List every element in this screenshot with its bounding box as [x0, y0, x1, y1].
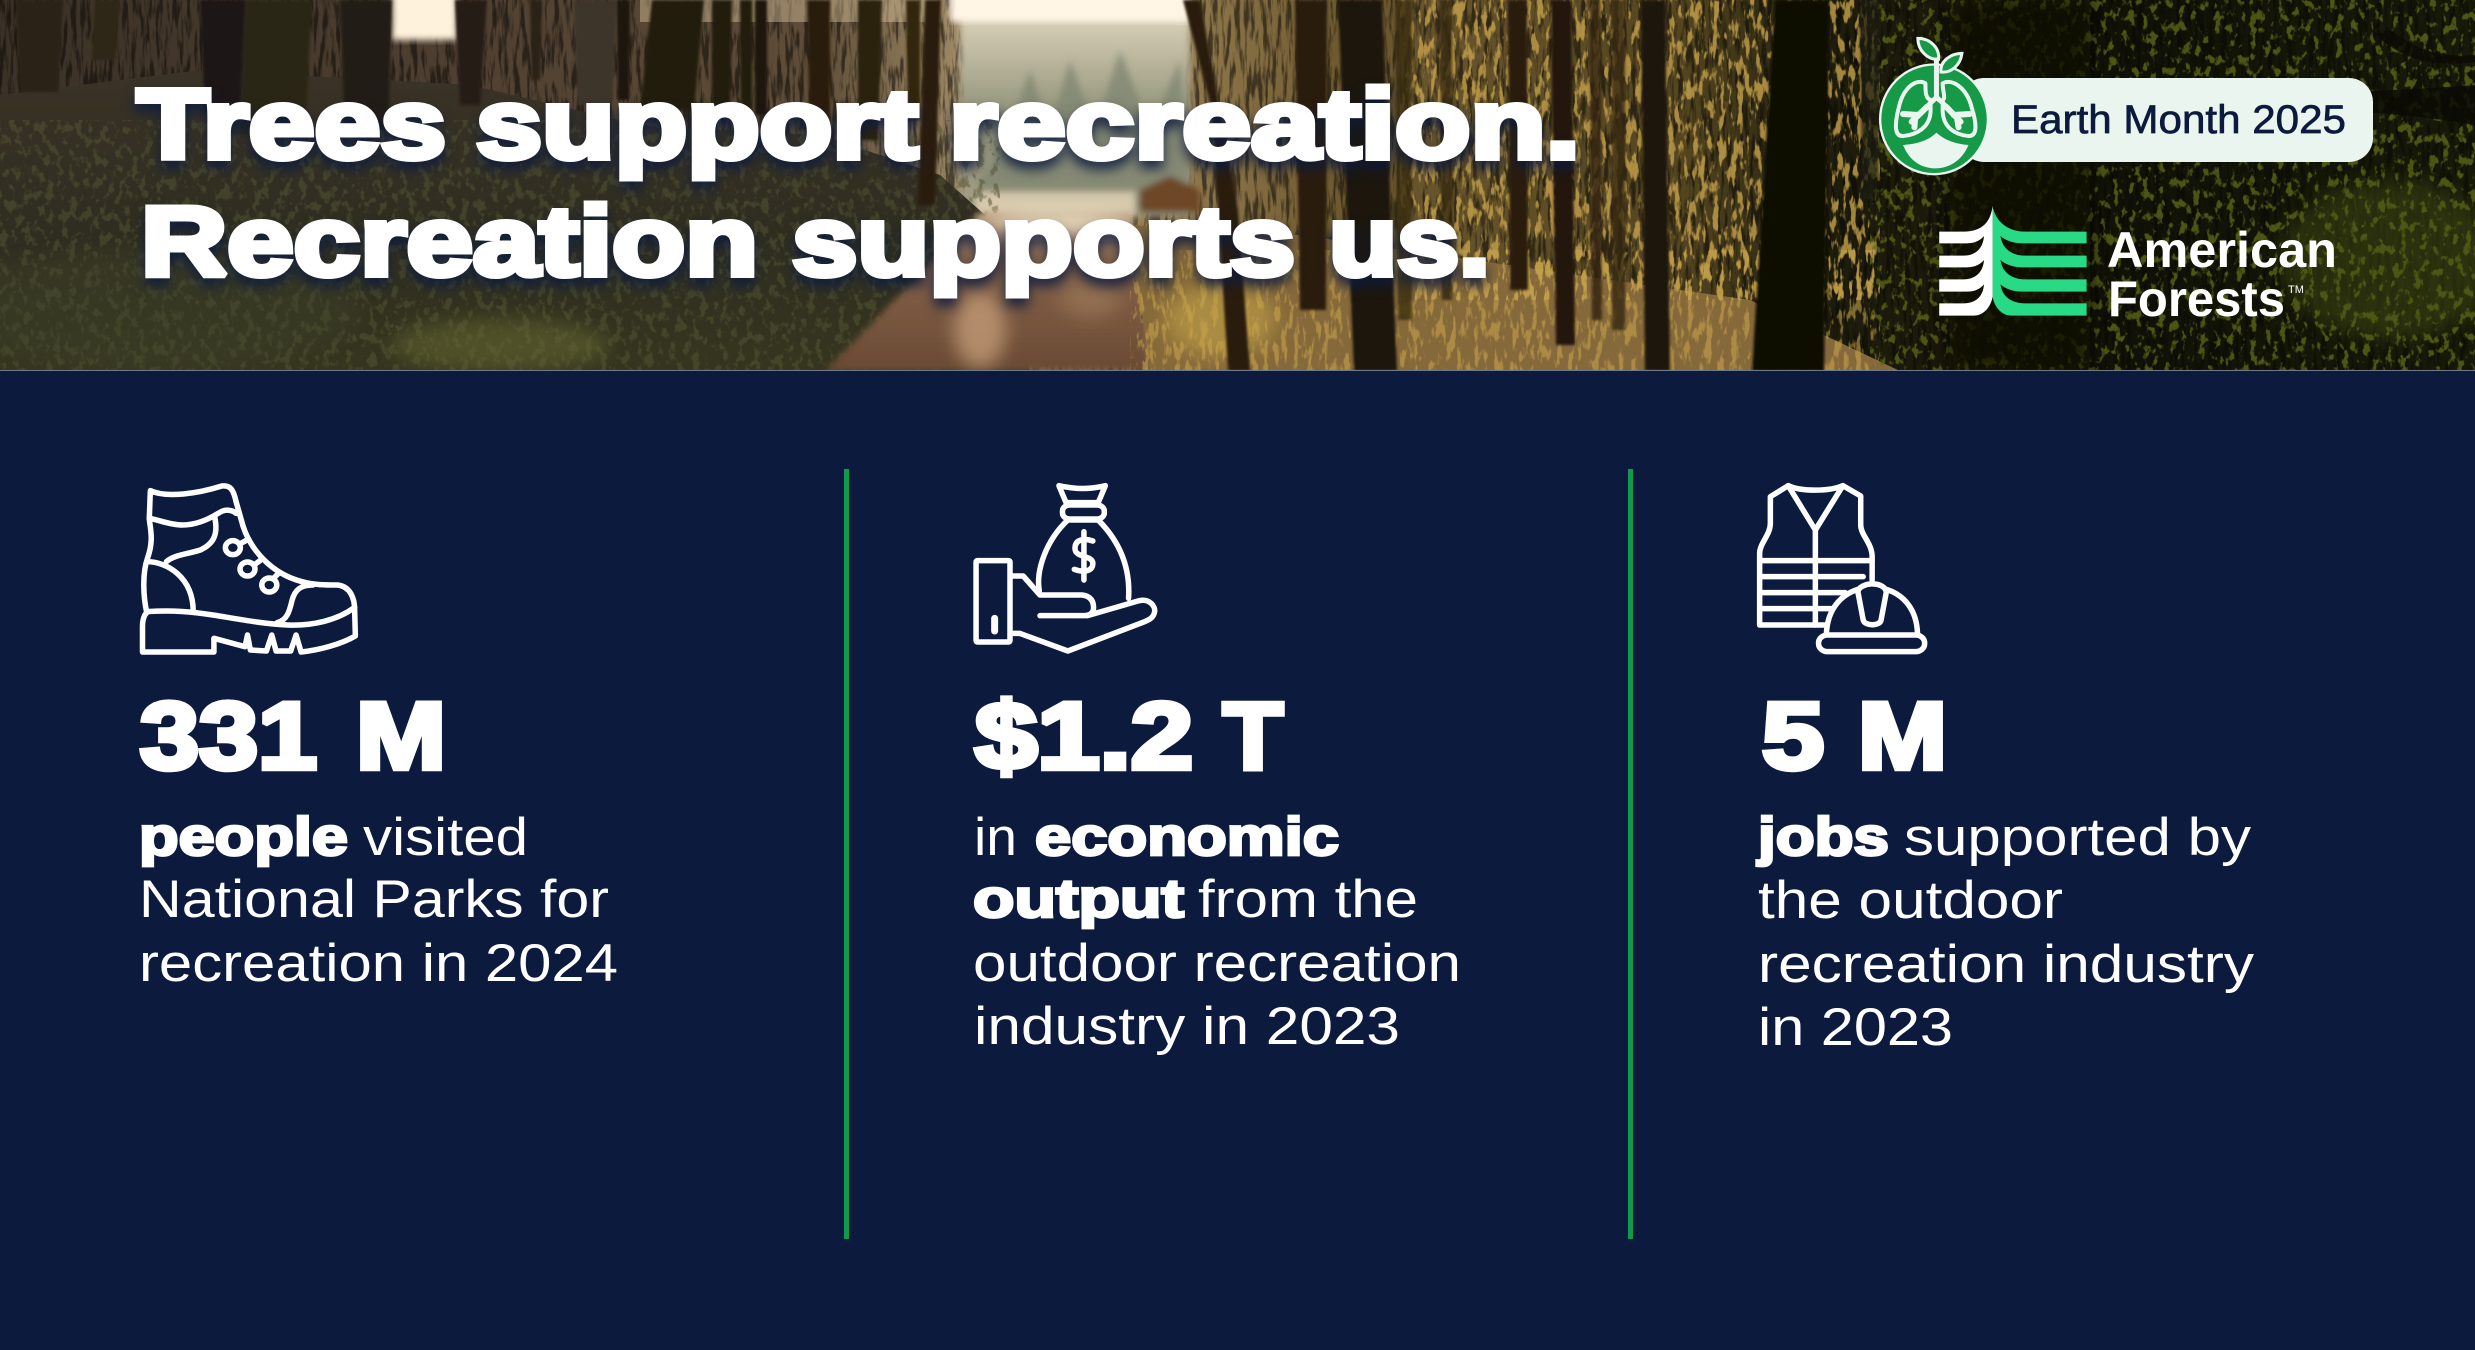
- description: people visited National Parks: people: [139, 807, 348, 867]
- right canopy: [1870, 0, 2475, 371]
- left hillside: [0, 70, 1030, 371]
- dirt path: [825, 210, 1150, 371]
- description: people visited National Parks: visited: [363, 808, 528, 867]
- description: economic output: outdoor recreation: [973, 934, 1461, 993]
- title: two-line heading: support: [476, 69, 918, 179]
- stat: 5 M: M: [1858, 684, 1947, 790]
- description: people visited National Parks: National Parks for: [139, 870, 609, 929]
- stat: 331 M: [140, 684, 446, 790]
- logo: American Forests: TM: [2288, 284, 2304, 296]
- description: jobs supported: in 2023: [1758, 998, 1953, 1057]
- description: jobs supported: supported by: [1904, 808, 2252, 867]
- description: people visited National Parks: recreation in 2024: [139, 934, 618, 993]
- logo: American Forests: [1939, 206, 2337, 327]
- description: economic output: [973, 807, 1461, 1056]
- golden undergrowth: [1130, 225, 1900, 371]
- title: two-line heading: recreation.: [949, 69, 1580, 179]
- stat: 5 M: [1762, 684, 1947, 790]
- description: economic output: output: [973, 869, 1184, 929]
- divider: [844, 469, 849, 1239]
- panel: national park visitors: [139, 486, 618, 993]
- header forest photo: [0, 0, 2475, 371]
- stat: 5 M: 5: [1762, 684, 1824, 790]
- title: two-line heading: us.: [1329, 186, 1490, 296]
- description: jobs supported: the outdoor: [1758, 871, 2063, 930]
- description: jobs supported: jobs: [1757, 807, 1889, 867]
- stat: $1.2 T: T: [1223, 684, 1283, 790]
- panel: jobs supported: [1757, 486, 2255, 1057]
- moss on trunks: [1400, 0, 1880, 300]
- badge: Earth Month 2025: Earth Month 2025: [2011, 98, 2346, 142]
- logo: American Forests: Forests: [2108, 271, 2285, 327]
- title: two-line heading: [137, 69, 1580, 296]
- tree trunks: [16, 0, 1880, 371]
- description: economic output: from the: [1198, 870, 1418, 929]
- icon: hiking boot: [142, 486, 355, 652]
- description: jobs supported: recreation industry: [1758, 935, 2255, 994]
- badge: Earth Month 2025: [1879, 38, 2373, 175]
- panel: economic output: [973, 486, 1461, 1056]
- stat: $1.2 T: $1.2: [975, 684, 1193, 790]
- description: economic output: in: [974, 808, 1017, 867]
- stat: $1.2 T: [975, 684, 1283, 790]
- stat: 331 M: M: [356, 684, 446, 790]
- icon: money bag on hand: [976, 486, 1155, 651]
- icon: safety vest and hard hat: [1760, 486, 1925, 652]
- description: economic output: industry in 2023: [974, 997, 1400, 1056]
- logo: American Forests: American: [2107, 222, 2337, 278]
- title: two-line heading: Recreation: [141, 186, 758, 296]
- description: economic output: economic: [1035, 807, 1339, 867]
- title: two-line heading: Trees: [137, 69, 446, 179]
- stat: 331 M: 331: [140, 684, 317, 790]
- description: people visited National Parks: [139, 807, 618, 993]
- divider: [1628, 469, 1633, 1239]
- title: two-line heading: supports: [792, 186, 1295, 296]
- description: jobs supported: [1757, 807, 2255, 1057]
